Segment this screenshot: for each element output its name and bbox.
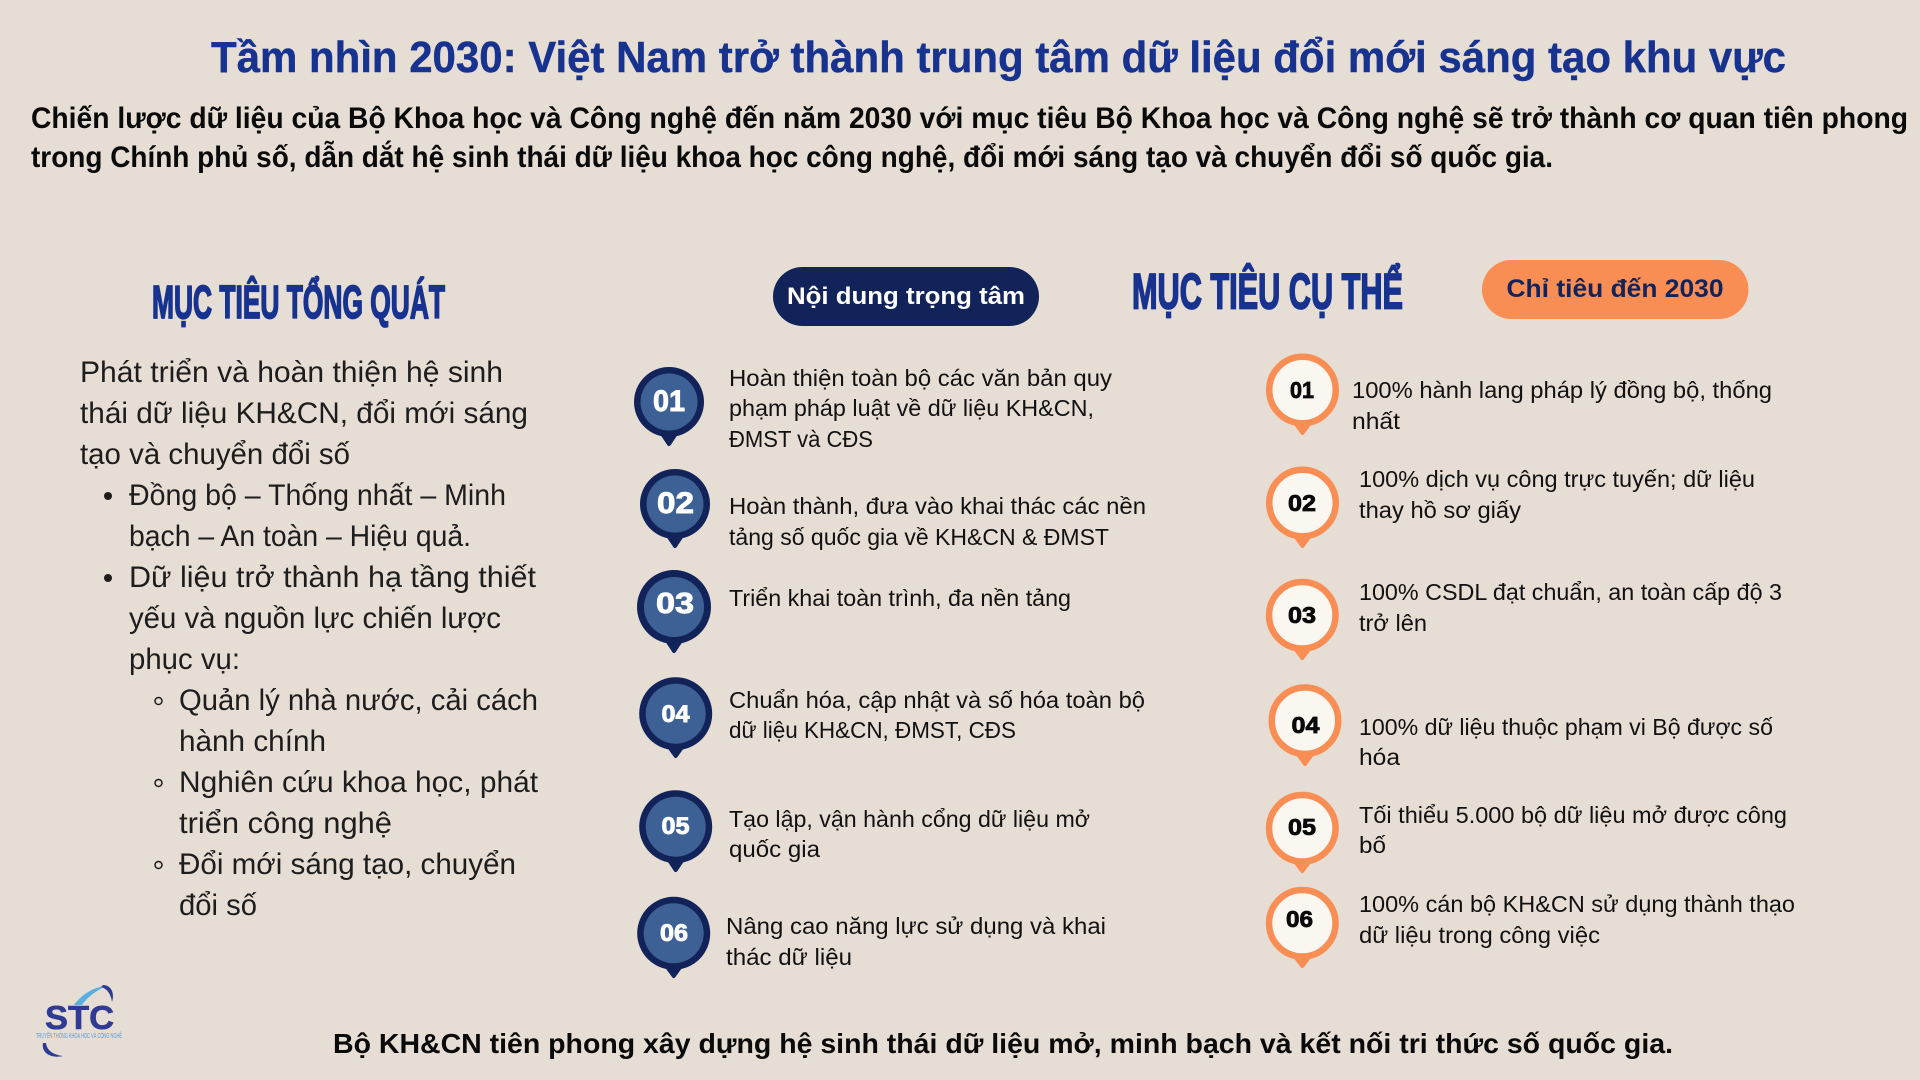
logo: STC: STC <box>45 999 114 1036</box>
item 02: tảng số quốc gia về KH&CN & ĐMST <box>729 524 1109 550</box>
target 05: 05 <box>1288 814 1316 840</box>
item 03: 03 <box>656 588 694 620</box>
target 02: 100% dịch vụ công trực tuyến; dữ liệu <box>1359 466 1755 492</box>
item 04: dữ liệu KH&CN, ĐMST, CĐS <box>729 717 1016 743</box>
target 02: thay hồ sơ giấy <box>1359 497 1522 523</box>
panel: general goals text: yếu và nguồn lực chiến lược <box>129 602 501 635</box>
target 01: 100% hành lang pháp lý đồng bộ, thống <box>1352 377 1772 403</box>
target 03: 03 <box>1288 602 1316 628</box>
target 01 <box>1269 357 1772 434</box>
item 04 <box>639 677 1145 756</box>
panel: general goals text: bạch – An toàn – Hiệu quả. <box>129 520 471 553</box>
item 02 <box>640 469 1146 550</box>
target 04: 100% dữ liệu thuộc phạm vi Bộ được số <box>1359 714 1773 740</box>
item 01: ĐMST và CĐS <box>729 426 873 452</box>
panel: general goals text: Quản lý nhà nước, cải cách <box>179 684 538 717</box>
target 06: dữ liệu trong công việc <box>1359 922 1600 948</box>
item 05: quốc gia <box>729 836 820 862</box>
item 06: Nâng cao năng lực sử dụng và khai <box>726 913 1106 939</box>
item 02: Hoàn thành, đưa vào khai thác các nền <box>729 493 1146 519</box>
item 04: 04 <box>662 701 690 728</box>
heading: specific goals: MỤC TIÊU CỤ THỂ <box>1132 264 1403 320</box>
target 05 <box>1269 795 1787 871</box>
target 03: trở lên <box>1359 610 1427 636</box>
panel: general goals text: phục vụ: <box>129 643 240 676</box>
panel: general goals text: tạo và chuyển đổi số <box>80 438 350 471</box>
target 03 <box>1269 579 1782 658</box>
panel: general goals text: triển công nghệ <box>179 807 392 840</box>
target 02 <box>1269 466 1755 546</box>
target 04: hóa <box>1359 744 1400 770</box>
item 02: 02 <box>657 487 694 520</box>
item 05: Tạo lập, vận hành cổng dữ liệu mở <box>729 806 1090 832</box>
target 01: 01 <box>1290 377 1314 403</box>
item 05: 05 <box>662 813 690 840</box>
item 01: Hoàn thiện toàn bộ các văn bản quy <box>729 365 1113 391</box>
item 01: phạm pháp luật về dữ liệu KH&CN, <box>729 395 1094 421</box>
panel: general goals text <box>80 356 539 922</box>
target 04 <box>1272 687 1773 770</box>
target 02: 02 <box>1288 490 1316 516</box>
panel: specific targets list <box>1269 357 1795 966</box>
item 06 <box>637 897 1106 976</box>
pill: key content: Nội dung trọng tâm <box>787 283 1025 310</box>
panel: general goals text: thái dữ liệu KH&CN, đổi mới sáng <box>80 397 528 430</box>
panel: general goals text: Đồng bộ – Thống nhất – Minh <box>129 479 506 512</box>
item 06: thác dữ liệu <box>726 944 852 970</box>
panel: general goals text: hành chính <box>179 725 326 758</box>
item 03: Triển khai toàn trình, đa nền tảng <box>729 585 1071 611</box>
panel: key content list <box>634 365 1146 976</box>
item 04: Chuẩn hóa, cập nhật và số hóa toàn bộ <box>729 687 1145 713</box>
target 04: 04 <box>1292 712 1320 738</box>
logo: STC: TRUYỀN THÔNG KHOA HỌC VÀ CÔNG NGHỆ <box>36 1030 122 1040</box>
logo: STC <box>36 985 122 1057</box>
target 05: Tối thiểu 5.000 bộ dữ liệu mở được công <box>1359 802 1787 828</box>
target 06: 100% cán bộ KH&CN sử dụng thành thạo <box>1359 891 1795 917</box>
pill: targets to 2030 <box>1482 260 1748 319</box>
panel: general goals text: đổi số <box>179 889 257 922</box>
title: Tầm nhìn 2030: Việt Nam trở thành trung tâm dữ liệu đổi mới sáng tạo khu vực <box>211 33 1786 82</box>
intro text <box>31 102 1908 174</box>
pill: targets to 2030: Chỉ tiêu đến 2030 <box>1506 275 1724 303</box>
intro text: trong Chính phủ số, dẫn dắt hệ sinh thái dữ liệu khoa học công nghệ, đổi mới sáng tạo và chuyển đổi số quốc gia. <box>31 140 1553 174</box>
panel: general goals text: Nghiên cứu khoa học, phát <box>179 766 539 799</box>
panel: general goals text: Phát triển và hoàn thiện hệ sinh <box>80 356 503 389</box>
item 06: 06 <box>660 920 688 947</box>
footer statement: Bộ KH&CN tiên phong xây dựng hệ sinh thái dữ liệu mở, minh bạch và kết nối tri thức số quốc gia. <box>333 1028 1673 1059</box>
target 03: 100% CSDL đạt chuẩn, an toàn cấp độ 3 <box>1359 579 1782 605</box>
panel: general goals text: Đổi mới sáng tạo, chuyển <box>179 848 516 881</box>
target 01: nhất <box>1352 408 1401 434</box>
target 06: 06 <box>1286 906 1313 932</box>
panel: general goals text: Dữ liệu trở thành hạ tầng thiết <box>129 561 537 594</box>
heading: general goals: MỤC TIÊU TỔNG QUÁT <box>152 276 445 328</box>
item 01 <box>634 365 1113 452</box>
item 03 <box>637 570 1071 651</box>
target 05: bố <box>1359 832 1386 858</box>
target 06 <box>1269 890 1795 966</box>
item 05 <box>639 790 1090 870</box>
pill: key content <box>773 267 1039 326</box>
item 01: 01 <box>653 385 685 418</box>
